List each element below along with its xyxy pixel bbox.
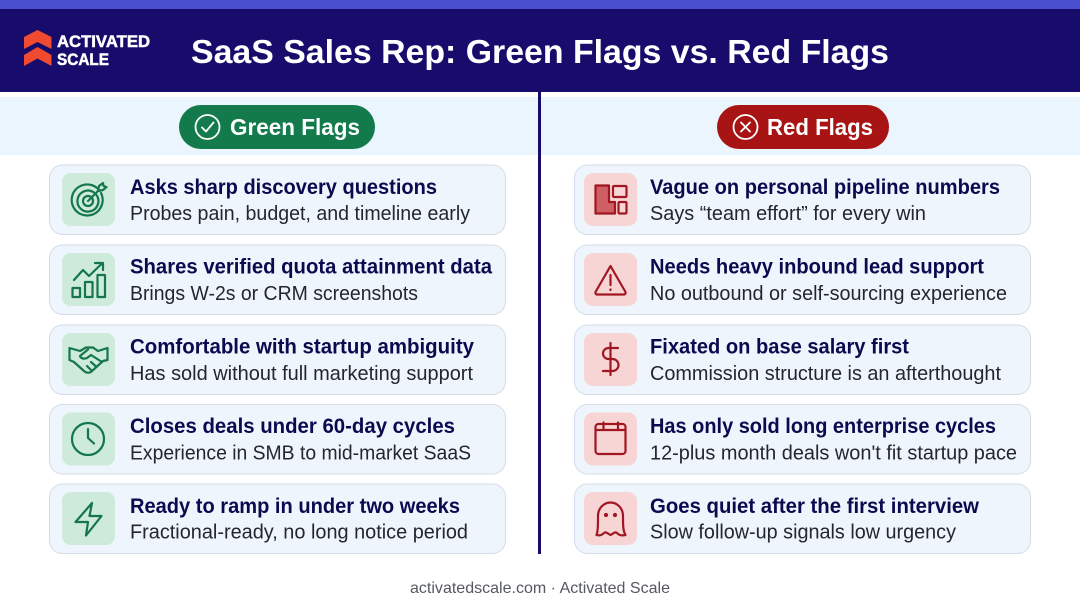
green card 5: Fractional-ready, no long notice period: [130, 522, 468, 544]
green flags pill: Green Flags: [230, 114, 360, 140]
green card 3: Has sold without full marketing support: [130, 363, 473, 385]
red flags pill: Red Flags: [767, 114, 873, 140]
red card 1: [574, 165, 1030, 234]
red card 5: [574, 484, 1030, 554]
green card 2: Shares verified quota attainment data: [130, 256, 492, 278]
red card 4: [574, 404, 1030, 474]
green flags pill: [179, 105, 375, 149]
logo: SCALE: [57, 51, 109, 69]
red card 2: [574, 245, 1030, 314]
center divider: [538, 92, 541, 554]
green column header band: [0, 97, 538, 155]
title: SaaS Sales Rep: Green Flags vs. Red Flags: [191, 33, 889, 70]
red card 1: Vague on personal pipeline numbers: [650, 176, 1000, 199]
green card 1: [50, 165, 506, 234]
header banner: [0, 0, 1080, 92]
red card 3: [574, 325, 1030, 394]
red card 5: Slow follow-up signals low urgency: [650, 522, 956, 544]
green card 2: Brings W-2s or CRM screenshots: [130, 283, 418, 305]
red card 4: Has only sold long enterprise cycles: [650, 415, 996, 438]
icon: handshake: [70, 348, 108, 373]
icon: clock: [72, 423, 104, 455]
green card 3: [50, 325, 506, 394]
red card 4: 12-plus month deals won't fit startup pace: [650, 442, 1017, 464]
green card 4: Experience in SMB to mid-market SaaS: [130, 442, 471, 464]
logo: [24, 30, 150, 69]
icon: calendar: [596, 422, 626, 454]
green card 5: [50, 484, 506, 554]
logo: ACTIVATED: [57, 33, 150, 51]
icon: target: [72, 183, 106, 215]
red card 5: Goes quiet after the first interview: [650, 495, 980, 518]
red card 1: Says “team effort” for every win: [650, 203, 926, 225]
red card 3: Fixated on base salary first: [650, 336, 909, 358]
icon: mismatched blocks: [596, 186, 626, 214]
green card 1: Asks sharp discovery questions: [130, 176, 437, 199]
green card 5: Ready to ramp in under two weeks: [130, 495, 460, 518]
icon: ghost: [596, 502, 626, 535]
icon: growth chart: [72, 263, 105, 297]
footer: activatedscale.com · Activated Scale: [410, 580, 670, 597]
red flags pill: [717, 105, 889, 149]
green card 4: [50, 404, 506, 474]
green card 4: Closes deals under 60-day cycles: [130, 415, 455, 438]
green card 3: Comfortable with startup ambiguity: [130, 336, 474, 358]
icon: warning triangle: [595, 266, 626, 294]
green card 2: [50, 245, 506, 314]
icon: dollar sign: [603, 343, 618, 375]
red card 2: No outbound or self-sourcing experience: [650, 283, 1007, 305]
red column header band: [541, 97, 1080, 155]
icon: lightning bolt: [76, 503, 102, 536]
green card 1: Probes pain, budget, and timeline early: [130, 203, 470, 225]
red card 2: Needs heavy inbound lead support: [650, 256, 984, 278]
red card 3: Commission structure is an afterthought: [650, 363, 1001, 385]
